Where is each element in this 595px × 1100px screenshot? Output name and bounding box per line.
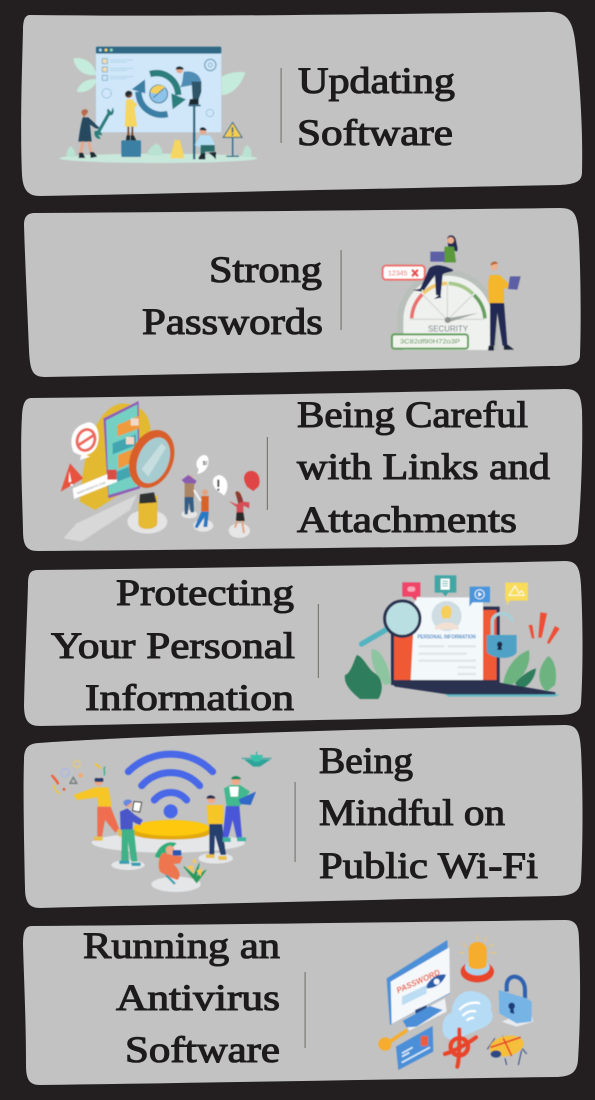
magnifying glass (121, 423, 183, 534)
wi-fi cloud (443, 991, 493, 1039)
heading: updating software: Updating (298, 61, 455, 102)
icon: isometric security items (378, 935, 533, 1070)
divider (318, 604, 319, 678)
man in green with laptop (223, 776, 256, 842)
red rejected password tag: 12345 (388, 270, 408, 277)
heading: being careful with links and attachments: Attachments (297, 500, 517, 541)
doodles floating (52, 761, 105, 794)
icon: security gauge with two people (383, 235, 521, 350)
woman with wrench (78, 107, 114, 158)
man in yellow with VR headset (73, 778, 121, 841)
green strong password tag: 3C82df90H72o3P (400, 339, 460, 346)
warning sign (223, 123, 242, 157)
panel: updating software (21, 12, 582, 196)
divider (280, 68, 282, 143)
credit card (396, 1026, 433, 1070)
fake url bar (73, 470, 117, 499)
heading: being careful with links and attachments: Being Careful (297, 395, 528, 436)
person with tablet in blue (119, 799, 143, 866)
heading: updating software (297, 61, 455, 154)
wi-fi symbol (128, 754, 213, 818)
no-entry speech bubble (71, 422, 99, 460)
open padlock (487, 614, 517, 658)
heading: strong passwords: Passwords (142, 302, 323, 343)
drone (242, 752, 272, 767)
crouching man (195, 127, 216, 159)
divider (294, 782, 296, 862)
woman photographing (155, 842, 183, 884)
heading: being careful with links and attachments: with Links and (297, 447, 551, 488)
man on pole (176, 66, 201, 159)
monitor with password text: PASSWORD (395, 967, 441, 995)
woman in yellow dress on box (121, 91, 141, 157)
speech bubbles: $! (203, 461, 208, 467)
magnifier (362, 601, 420, 644)
ladybug virus (487, 1033, 527, 1065)
divider (304, 972, 306, 1048)
alarm beacon (459, 935, 497, 982)
heading: protecting your personal information: Your Personal (51, 626, 295, 667)
panel: being mindful on public wi-fi (24, 725, 582, 908)
icon: security gauge with two people: SECURITY (428, 324, 468, 334)
heading: being mindful on public wi-fi: Being (319, 741, 413, 782)
heading: strong passwords: Strong (209, 250, 322, 291)
floating app bubbles (402, 575, 528, 607)
monitor with password text (387, 940, 450, 1031)
heading: running an antivirus software: Software (125, 1030, 280, 1071)
icon: phone, magnifier and worried people (61, 401, 260, 542)
red crossbones bug symbol (445, 1029, 476, 1067)
heading: being mindful on public wi-fi: Public Wi-Fi (319, 846, 538, 887)
divider (340, 250, 342, 330)
padlock (499, 977, 533, 1027)
heading: running an antivirus software: Antivirus (116, 978, 280, 1019)
document (411, 597, 483, 680)
heading: protecting your personal information: Protecting (116, 573, 294, 614)
heading: protecting your personal information (51, 573, 295, 719)
speech bubbles (196, 455, 260, 496)
panel: protecting your personal information (24, 561, 582, 726)
traffic cone (170, 140, 185, 158)
heading: being mindful on public wi-fi (319, 741, 538, 887)
man in yellow shirt (206, 795, 227, 860)
icon: people updating software on a big screen (59, 47, 257, 163)
warning triangle (61, 463, 83, 492)
heading: being mindful on public wi-fi: Mindful on (319, 793, 505, 834)
document: PERSONAL INFORMATION (417, 635, 476, 641)
heading: updating software: Software (297, 113, 453, 154)
man with tablet (488, 262, 521, 350)
exclamation marks (529, 612, 560, 644)
worried people (181, 475, 250, 538)
key (378, 1030, 407, 1051)
fake url bar: WWW.WEBSITE.COM (76, 480, 106, 495)
heading: protecting your personal information: Information (85, 678, 294, 719)
icon: wi-fi signal with people using devices (52, 752, 272, 892)
yellow flowers plant (184, 858, 206, 883)
panel: running an antivirus software (23, 920, 580, 1085)
icon: laptop with personal information (345, 575, 560, 699)
woman with laptop on gauge (413, 235, 458, 299)
heading: running an antivirus software: Running an (83, 926, 280, 967)
divider (267, 437, 268, 510)
panel: strong passwords (24, 208, 581, 377)
panel: being careful with links and attachments (21, 389, 582, 551)
heading: being careful with links and attachments (297, 395, 551, 541)
heading: strong passwords (142, 250, 323, 343)
heading: running an antivirus software (83, 926, 280, 1071)
